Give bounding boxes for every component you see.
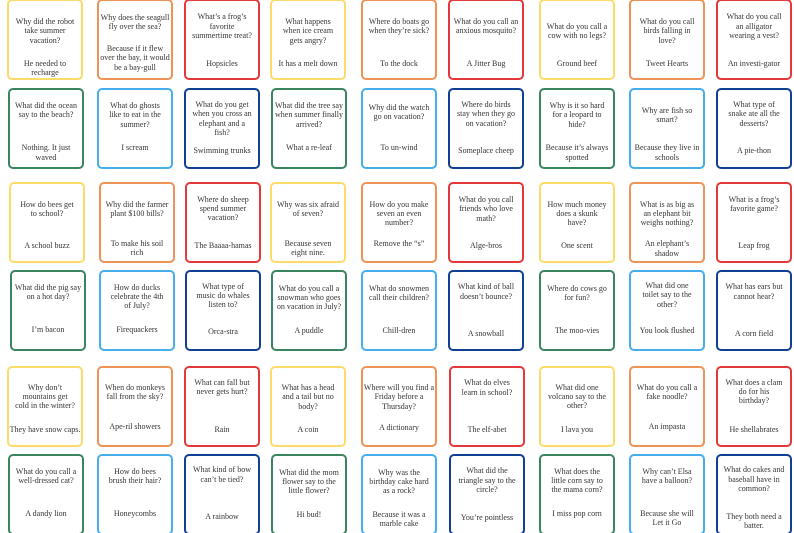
card: cakes and baseball: common?	[738, 484, 770, 493]
card: mosquito: anxious mosquito?	[456, 26, 516, 35]
card: sheep	[185, 182, 261, 263]
card: bees school: How do bees get	[20, 200, 74, 209]
card: bees school: A school buzz	[24, 241, 70, 250]
card: noodle	[629, 366, 705, 447]
card: farmer: plant $100 bills?	[110, 209, 164, 218]
card: frog game: favorite game?	[730, 204, 778, 213]
card: frog treat: summertime treat?	[192, 31, 252, 40]
card: mountains: Why don’t	[28, 383, 62, 392]
card: Elsa: Why can’t Elsa	[642, 467, 692, 476]
card: seven even: number?	[385, 218, 413, 227]
card: clam: birthday?	[739, 396, 769, 405]
card: alligator: What do you call	[727, 12, 781, 21]
card: bow: A rainbow	[205, 512, 239, 521]
card: ducks	[99, 270, 175, 351]
card: Elsa	[629, 454, 705, 533]
card: mosquito	[448, 0, 524, 80]
card: bow: What kind of bow	[193, 465, 251, 474]
card: snake	[716, 88, 792, 169]
card: ocean: Nothing. It just	[22, 143, 70, 152]
card: fall but not hurt	[184, 366, 260, 447]
card: Elsa: have a balloon?	[642, 476, 692, 485]
card: noodle: An impasta	[649, 422, 685, 431]
card: elves: learn in school?	[462, 388, 512, 397]
card: ears: What has ears but	[725, 282, 783, 291]
card: robot vacation	[7, 0, 83, 80]
card: ghosts: What do ghosts	[110, 101, 160, 110]
card: snowman July: What do you call a	[279, 284, 339, 293]
card: leopard: Because it’s always	[546, 143, 608, 152]
card: ghosts: like to eat in the	[109, 110, 161, 119]
card: bow: can’t be tied?	[201, 475, 243, 484]
card: snake: A pie-thon	[737, 146, 771, 155]
card: dandy cat: well-dressed cat?	[18, 476, 74, 485]
card: six afraid of seven: eight nine.	[291, 248, 325, 257]
card: seagull: Because if it flew	[107, 44, 163, 53]
card: ducks: celebrate the 4th	[111, 292, 163, 301]
card: bees hair: Honeycombs	[114, 509, 156, 518]
card: friends math: friends who love	[459, 204, 513, 213]
card: noodle: What do you call a	[637, 383, 697, 392]
card: ears: cannot hear?	[734, 292, 774, 301]
card: pig	[10, 270, 86, 351]
card: ducks: How do ducks	[114, 283, 160, 292]
card: clam: What does a clam	[725, 378, 783, 387]
card: birthday cake: Why was the	[378, 468, 420, 477]
card: mom flower: little flower?	[288, 486, 330, 495]
card: skunk: How much money	[547, 200, 607, 209]
card: clam: He shellabrates	[729, 425, 779, 434]
card: birthday cake: as a rock?	[383, 486, 415, 495]
card: head and tail: What has a head	[282, 383, 334, 392]
card: mom flower	[271, 454, 347, 533]
card: snake: snake ate all the	[728, 109, 780, 118]
card: alligator: an alligator	[736, 22, 772, 31]
card: head and tail: and a tail but no	[282, 392, 334, 401]
card: elephant and fish: What do you get	[195, 100, 249, 109]
card: mountains: They have snow caps.	[10, 425, 80, 434]
card: birds vacation: on vacation?	[466, 119, 506, 128]
card: mountains: cold in the winter?	[15, 401, 75, 410]
card: skunk: does a skunk	[556, 209, 598, 218]
card: snowman July	[271, 270, 347, 351]
card: cakes and baseball: What do cakes and	[724, 465, 784, 474]
card: tree: when summer finally	[275, 110, 343, 119]
card: elephant and fish: elephant and a	[199, 119, 245, 128]
card: robot vacation: vacation?	[30, 36, 60, 45]
card: ducks: Firequackers	[116, 325, 158, 334]
card: fish smart	[629, 88, 705, 169]
card: volcano: volcano say to the	[548, 392, 606, 401]
card: mountains	[7, 366, 83, 447]
card: ears	[716, 270, 792, 351]
card: fish smart: smart?	[656, 115, 678, 124]
card: monkeys	[97, 366, 173, 447]
card: elves	[449, 366, 525, 447]
card: six afraid of seven: Because seven	[285, 239, 331, 248]
card: watch: To un-wind	[380, 143, 418, 152]
card: seven even: Remove the “s”	[374, 239, 424, 248]
card: volcano: I lava you	[561, 425, 593, 434]
card: seagull: fly over the sea?	[109, 22, 161, 31]
card: mosquito: A Jitter Bug	[467, 59, 505, 68]
card: little corn: the mama corn?	[551, 485, 603, 494]
card: triangle: You’re pointless	[461, 513, 513, 522]
card: volcano: What did one	[555, 383, 599, 392]
card: cows: The moo-vies	[555, 326, 599, 335]
card: seagull: over the bay, it would	[100, 53, 170, 62]
card: cakes and baseball	[716, 454, 792, 533]
card: head and tail: body?	[298, 402, 318, 411]
card: Friday before Thursday	[361, 366, 437, 447]
card: birthday cake: birthday cake hard	[369, 477, 429, 486]
card: birds vacation: stay when they go	[457, 109, 515, 118]
card: birds vacation: Where do birds	[461, 100, 511, 109]
card: ocean: waved	[36, 153, 56, 162]
card: monkeys: Ape-ril showers	[109, 422, 161, 431]
card: ocean	[8, 88, 84, 169]
card: snowman July: A puddle	[294, 326, 324, 335]
card: cows: Where do cows go	[547, 284, 607, 293]
card: birds in love: What do you call	[640, 17, 694, 26]
card: robot vacation: recharge	[31, 68, 59, 77]
card: triangle: What did the	[466, 466, 508, 475]
card: friends math: What do you call	[459, 195, 513, 204]
card: snowmen children: call their children?	[369, 293, 429, 302]
card: triangle	[449, 454, 525, 533]
card: Friday before Thursday: Friday before a	[375, 392, 423, 401]
card: skunk: have?	[568, 218, 586, 227]
card: elephant shadow: shadow	[655, 249, 679, 258]
card: fish smart: Because they live in	[635, 143, 699, 152]
card: Friday before Thursday: Where will you find a	[364, 383, 434, 392]
card: Friday before Thursday: A dictionary	[379, 423, 419, 432]
card: head and tail: A coin	[297, 425, 319, 434]
card: mom flower: flower say to the	[282, 477, 336, 486]
card: watch: Why did the watch	[369, 103, 429, 112]
card: leopard	[539, 88, 615, 169]
card: leopard: Why is it so hard	[550, 101, 604, 110]
card: elephant shadow: weighs nothing?	[641, 218, 693, 227]
card: little corn: little corn say to	[551, 476, 603, 485]
card: sheep: Where do sheep	[197, 195, 249, 204]
card: frog game: Leap frog	[738, 241, 770, 250]
card: little corn: What does the	[554, 467, 600, 476]
card: pig: I’m bacon	[32, 325, 64, 334]
card: monkeys: fall from the sky?	[107, 392, 163, 401]
card: snowmen children: Chill-dren	[383, 326, 415, 335]
card: bees hair: brush their hair?	[109, 476, 161, 485]
card: seven even: seven an even	[377, 209, 421, 218]
card: cakes and baseball: They both need a	[726, 512, 782, 521]
card: volcano: other?	[567, 401, 587, 410]
card: seven even: How do you make	[370, 200, 428, 209]
card: alligator	[716, 0, 792, 80]
card: fall but not hurt: Rain	[214, 425, 230, 434]
card: dandy cat: A dandy lion	[25, 509, 67, 518]
card: elves: What do elves	[464, 378, 510, 387]
card: elephant and fish: Swimming trunks	[193, 146, 251, 155]
card: clam	[716, 366, 792, 447]
card: monkeys: When do monkeys	[105, 383, 165, 392]
card: clam: do for his	[739, 387, 769, 396]
card: whales: music do whales	[196, 291, 250, 300]
card: farmer: To make his soil	[111, 239, 163, 248]
card: cows	[539, 270, 615, 351]
card: robot vacation: He needed to	[24, 59, 66, 68]
card: ice cream: It has a melt down	[278, 59, 338, 68]
card: frog game: What is a frog’s	[729, 195, 779, 204]
card: toilet: toilet say to the	[642, 290, 692, 299]
card: farmer: rich	[131, 248, 143, 257]
card: ball	[448, 270, 524, 351]
card: skunk: One scent	[561, 241, 593, 250]
card: bees hair	[97, 454, 173, 533]
card: sheep: The Baaaa-hamas	[194, 241, 252, 250]
card: tree	[271, 88, 347, 169]
card: noodle: fake noodle?	[646, 392, 688, 401]
card: birds in love	[629, 0, 705, 80]
card: birds in love: birds falling in	[643, 26, 691, 35]
card: volcano	[539, 366, 615, 447]
card: little corn: I miss pop corn	[552, 509, 602, 518]
card: fish smart: Why are fish so	[642, 106, 692, 115]
card: ball: A snowball	[468, 329, 504, 338]
card: sheep: spend summer	[200, 204, 246, 213]
card: ghosts: I scream	[121, 143, 149, 152]
card: elephant shadow: an elephant bit	[643, 209, 691, 218]
card: ghosts	[97, 88, 173, 169]
card: friends math: Alge-bros	[470, 241, 502, 250]
card: snake: What type of	[733, 100, 775, 109]
card: toilet	[629, 270, 705, 351]
card: whales: Orca-stra	[208, 327, 238, 336]
card: triangle: triangle say to the	[458, 476, 516, 485]
card: sheep: vacation?	[208, 213, 238, 222]
card: six afraid of seven: Why was six afraid	[277, 200, 339, 209]
card: bees hair: How do bees	[114, 467, 156, 476]
card: frog treat: favorite	[210, 22, 234, 31]
card: ice cream: when ice cream	[283, 26, 333, 35]
card: Friday before Thursday: Thursday?	[382, 402, 416, 411]
card: alligator: An investi-gator	[728, 59, 780, 68]
card: tree: What a re-leaf	[286, 143, 332, 152]
card: ocean: What did the ocean	[15, 101, 77, 110]
card: six afraid of seven: of seven?	[293, 209, 323, 218]
card: snake: desserts?	[740, 119, 768, 128]
card: cow: cow with no legs?	[548, 31, 606, 40]
card: cow: Ground beef	[557, 59, 597, 68]
card: little corn	[539, 454, 615, 533]
card: fall but not hurt: never gets hurt?	[196, 387, 248, 396]
card: ice cream: What happens	[285, 17, 331, 26]
card: birds vacation: Someplace cheep	[458, 146, 514, 155]
card: ball: What kind of ball	[458, 282, 514, 291]
card: birthday cake: marble cake	[380, 519, 418, 528]
card: mom flower: Hi bud!	[297, 510, 321, 519]
card: head and tail	[270, 366, 346, 447]
card: frog treat	[184, 0, 260, 80]
card: elephant shadow	[629, 182, 705, 263]
card: pig: on a hot day?	[27, 292, 69, 301]
card: snowman July: on vacation in July?	[277, 302, 341, 311]
card: seagull: be a bay-gull	[114, 63, 156, 72]
card: toilet: other?	[657, 300, 677, 309]
card: friends math: math?	[476, 214, 496, 223]
card: ice cream: gets angry?	[290, 36, 326, 45]
card: Elsa: Because she will	[640, 509, 694, 518]
card: pig: What did the pig say	[15, 283, 81, 292]
card: fish smart: schools	[655, 153, 679, 162]
card: birthday cake: Because it was a	[372, 510, 426, 519]
card: leopard: spotted	[565, 153, 589, 162]
card: leopard: hide?	[568, 120, 586, 129]
card: snowman July: snowman who goes	[277, 293, 341, 302]
card: six afraid of seven	[270, 182, 346, 263]
card: frog treat: Hopsicles	[206, 59, 238, 68]
card: alligator: wearing a vest?	[729, 31, 779, 40]
card: farmer	[99, 182, 175, 263]
card: ears: A corn field	[735, 329, 773, 338]
card: dandy cat	[8, 454, 84, 533]
card: bees school: to school?	[31, 209, 63, 218]
card: birds in love: love?	[658, 36, 676, 45]
card: robot vacation: take summer	[24, 26, 66, 35]
card: whales: What type of	[202, 282, 244, 291]
card: farmer: Why did the farmer	[106, 200, 168, 209]
card: elephant and fish	[184, 88, 260, 169]
card: watch	[361, 88, 437, 169]
card: whales: listen to?	[208, 300, 238, 309]
card: whales	[185, 270, 261, 351]
card: elephant shadow: An elephant’s	[645, 239, 689, 248]
card: seagull	[97, 0, 173, 80]
card: ducks: of July?	[124, 301, 150, 310]
card: elephant and fish: when you cross an	[192, 109, 252, 118]
card: cow: What do you call a	[547, 22, 607, 31]
card: fall but not hurt: What can fall but	[194, 378, 250, 387]
card: robot vacation: Why did the robot	[16, 17, 74, 26]
card: boats: when they’re sick?	[369, 26, 429, 35]
card: frog treat: What’s a frog’s	[198, 12, 246, 21]
card: bow	[184, 454, 260, 533]
card: boats	[361, 0, 437, 80]
card: elves: The elf-abet	[468, 425, 506, 434]
card: mosquito: What do you call an	[454, 17, 518, 26]
card: Elsa: Let it Go	[653, 518, 681, 527]
card: ghosts: summer?	[120, 120, 150, 129]
card: ice cream	[270, 0, 346, 80]
card: cows: for fun?	[564, 293, 590, 302]
card: skunk	[539, 182, 615, 263]
card: cakes and baseball: baseball have in	[728, 475, 780, 484]
card: dandy cat: What do you call a	[16, 467, 76, 476]
card: frog game	[716, 182, 792, 263]
card: birds in love: Tweet Hearts	[646, 59, 688, 68]
card: bees school	[9, 182, 85, 263]
card: cow	[539, 0, 615, 80]
card: ball: doesn’t bounce?	[460, 292, 512, 301]
card: seven even	[361, 182, 437, 263]
card: watch: go on vacation?	[374, 112, 424, 121]
card: elephant shadow: What is as big as	[640, 200, 694, 209]
card: elephant and fish: fish?	[214, 128, 230, 137]
card: cakes and baseball: batter.	[744, 521, 764, 530]
card: ocean: say to the beach?	[19, 110, 73, 119]
card: birds vacation	[448, 88, 524, 169]
card: leopard: for a leopard to	[552, 110, 602, 119]
card: toilet: You look flushed	[640, 326, 694, 335]
card: friends math	[448, 182, 524, 263]
card: seagull: Why does the seagull	[101, 13, 169, 22]
card: tree: What did the tree say	[275, 101, 343, 110]
card: snowmen children: What do snowmen	[369, 284, 429, 293]
card: toilet: What did one	[645, 281, 689, 290]
card: boats: Where do boats go	[369, 17, 429, 26]
card: mountains: mountains get	[22, 392, 68, 401]
card: boats: To the dock	[380, 59, 418, 68]
card: tree: arrived?	[296, 120, 322, 129]
card: mom flower: What did the mom	[279, 468, 339, 477]
card: triangle: circle?	[476, 485, 498, 494]
card: snowmen children	[361, 270, 437, 351]
card: birthday cake	[361, 454, 437, 533]
